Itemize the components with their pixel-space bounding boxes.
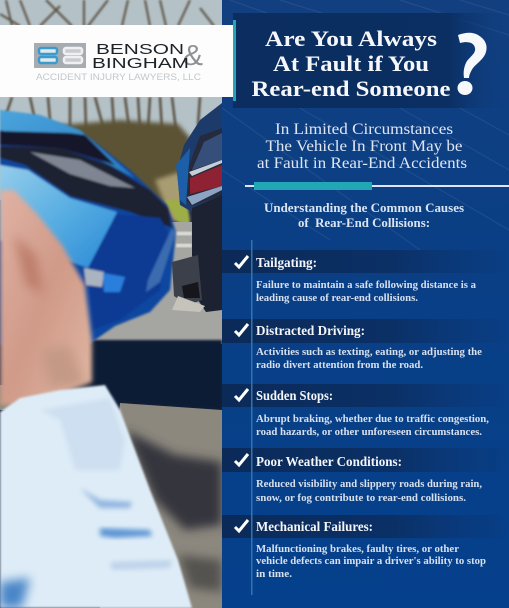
list item: mechanical failures: vehicle defects can impair a driver's ability to stop [256,555,486,567]
logo wordmark: & [183,40,203,72]
title heading: Are You Always [265,26,438,51]
list item: mechanical failures: in time. [256,568,292,580]
list item: tailgating: leading cause of rear-end collisions. [256,292,418,304]
list vertical rule [251,240,252,595]
logo wordmark: BENSON [96,41,184,58]
teal accent bar [233,20,236,101]
list item: poor weather conditions: Reduced visibility and slippery roads during rain, [256,478,482,490]
list item: sudden stops: Sudden Stops: [256,388,333,403]
list item: mechanical failures: Malfunctioning brakes, faulty tires, or other [256,543,459,555]
section heading: of Rear-End Collisions: [298,216,430,230]
list item: tailgating [222,250,509,304]
photo dark rear car with tail light [172,103,222,312]
title heading: Rear-end Someone [252,76,451,101]
logo wordmark [36,40,203,83]
list item: poor weather conditions [222,448,509,504]
photo sky and bare trees [0,0,222,200]
photo light-blue shirt sleeve [0,385,192,608]
list item: mechanical failures: Mechanical Failures: [256,519,373,534]
photo road surface [0,222,222,608]
subheading: In Limited Circumstances [275,121,453,138]
title band [233,13,509,108]
subheading [257,121,467,172]
list item: sudden stops: road hazards, or other unforeseen circumstances. [256,426,482,438]
logo wordmark: ACCIDENT INJURY LAWYERS, LLC [36,72,201,83]
list item: distracted driving: Activities such as texting, eating, or adjusting the [256,346,482,358]
photo blue front car [0,110,176,345]
photo: rear-end collision with driver in foreground [0,0,222,608]
title heading [252,26,451,101]
logo wordmark: BINGHAM [92,55,189,72]
section heading [264,201,464,230]
logo mark: BB [34,43,86,68]
list item: distracted driving [222,319,509,371]
photo blurred hand [0,190,92,405]
list item: mechanical failures [222,515,509,580]
subheading: The Vehicle In Front May be [266,138,462,155]
list of causes [222,240,509,595]
list item: poor weather conditions: snow, or fog contribute to rear-end collisions. [256,492,466,504]
subheading: at Fault in Rear-End Accidents [257,155,467,172]
list item: tailgating: Failure to maintain a safe following distance is a [256,279,476,291]
section heading: Understanding the Common Causes [264,201,464,215]
list item: sudden stops: Abrupt braking, whether due to traffic congestion, [256,413,489,425]
right navy panel [222,0,509,608]
photo hedge and grass [50,120,192,225]
title heading: At Fault if You [273,51,429,76]
list item: tailgating: Tailgating: [256,255,317,270]
list item: distracted driving: radio divert attention from the road. [256,359,423,371]
list item: poor weather conditions: Poor Weather Conditions: [256,454,402,469]
logo panel [0,20,236,101]
divider with teal bar [245,182,509,190]
icon: question mark [458,33,487,95]
list item: distracted driving: Distracted Driving: [256,323,365,338]
list item: sudden stops [222,384,509,438]
